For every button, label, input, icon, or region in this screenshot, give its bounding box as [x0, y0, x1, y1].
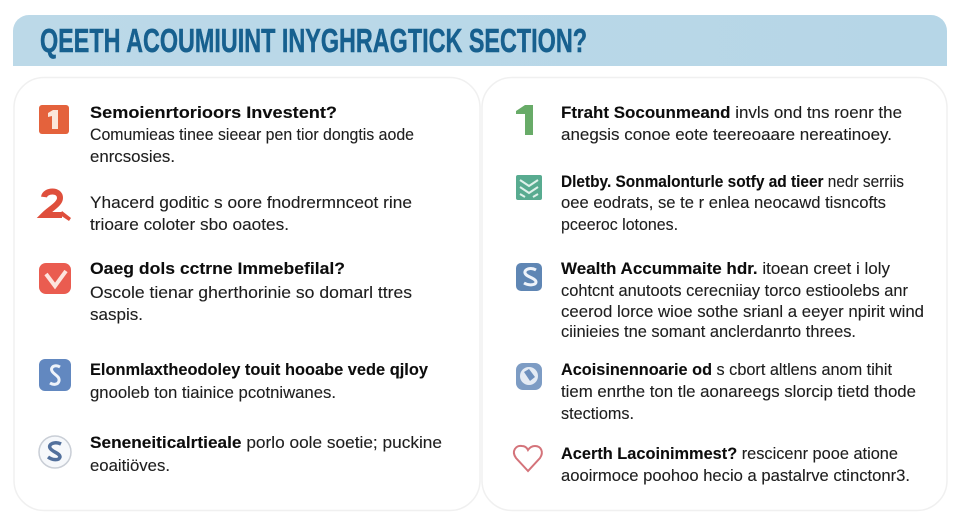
item 4 text: [90, 360, 429, 402]
item 4 text: [561, 360, 916, 423]
item 3: [39, 259, 412, 324]
item 5 text: [561, 444, 910, 485]
item 5 text: aooirmoce poohoo hecio a pastalrve ctinctonr3.: [561, 466, 910, 485]
item 3 text: Oaeg dols cctrne Immebefilal?: [90, 259, 345, 278]
icon: red heart outline: [514, 446, 542, 471]
item 3 text: saspis.: [90, 305, 143, 324]
icon: green number 1: [516, 105, 533, 135]
icon: red number 2: [44, 192, 71, 221]
item 3 text: [561, 259, 924, 341]
item 1 text: Comumieas tinee sieear pen tior dongtis aode: [90, 125, 414, 144]
item 3 text: Wealth Accummaite hdr. itoean creet i loly: [561, 259, 890, 278]
item 1 text: enrcsosies.: [90, 147, 175, 166]
item 5 text: [90, 433, 442, 475]
item 2 text: [561, 172, 904, 234]
item 4 text: gnooleb ton tiainice pcotniwanes.: [90, 383, 336, 402]
item 2: [44, 192, 412, 234]
icon: circled S: [39, 436, 71, 468]
item 2 text: oee eodrats, se te r enlea neocawd tisncofts: [561, 193, 886, 212]
item 4: [39, 359, 429, 402]
title: QEETH ACOUMIUINT INYGHRAGTICK SECTION?: [40, 22, 587, 59]
item 1 text: [90, 103, 414, 166]
item 2 text: pceeroc lotones.: [561, 215, 678, 234]
item 2 text: trioare coloter sbo oaotes.: [90, 215, 289, 234]
item 2 text: Dletby. Sonmalonturle sotfy ad tieer nedr serriis: [561, 172, 904, 191]
item 4: [516, 360, 916, 423]
item 2 text: [90, 193, 412, 234]
item 1 text: Semoienrtorioors Investent?: [90, 103, 337, 122]
panel: right column: [482, 78, 947, 510]
item 2: [516, 172, 904, 234]
icon: red check badge: [39, 263, 71, 294]
item 5: [514, 444, 910, 485]
item 4 text: tiem enrthe ton tle aonareegs slorcip tietd thode: [561, 382, 916, 401]
item 3 text: cohtcnt anutoots cerecniiay torco estioolebs anr: [561, 281, 908, 300]
icon: green chevrons card: [516, 175, 542, 200]
item 3 text: Oscole tienar gherthorinie so domarl ttres: [90, 283, 412, 302]
item 5: [39, 433, 442, 475]
icon: red number 1: [39, 105, 69, 134]
header banner: [13, 15, 947, 66]
item 4 text: Acoisinennoarie od s cbort altlens anom tihit: [561, 360, 892, 379]
item 3: [516, 259, 924, 341]
item 3 text: ciinieies tne somant anclerdanrto threes.: [561, 322, 856, 341]
item 3 text: [90, 259, 412, 324]
item 4 text: Elonmlaxtheodoley touit hooabe vede qjloy: [90, 360, 429, 379]
item 3 text: ceerod lorce wioe sothe srianl a eeyer npirit wind: [561, 302, 924, 321]
item 1 text: [561, 103, 902, 144]
item 5 text: Seneneiticalrtieale porlo oole soetie; puckine: [90, 433, 442, 452]
item 1 text: Ftraht Socounmeand invls ond tns roenr the: [561, 103, 902, 122]
item 1: [39, 103, 414, 166]
item 2 text: Yhacerd goditic s oore fnodrermnceot rine: [90, 193, 412, 212]
item 4 text: stectioms.: [561, 404, 634, 423]
icon: blue S badge: [39, 359, 71, 391]
icon: blue ring badge: [516, 363, 542, 390]
item 5 text: eoaitiöves.: [90, 456, 170, 475]
panel: left column: [14, 78, 480, 510]
item 1: [516, 103, 902, 144]
item 1 text: anegsis conoe eote teereoaare nereatinoey.: [561, 125, 892, 144]
icon: blue S badge: [516, 263, 542, 291]
item 5 text: Acerth Lacoinimmest? rescicenr pooe atione: [561, 444, 898, 463]
